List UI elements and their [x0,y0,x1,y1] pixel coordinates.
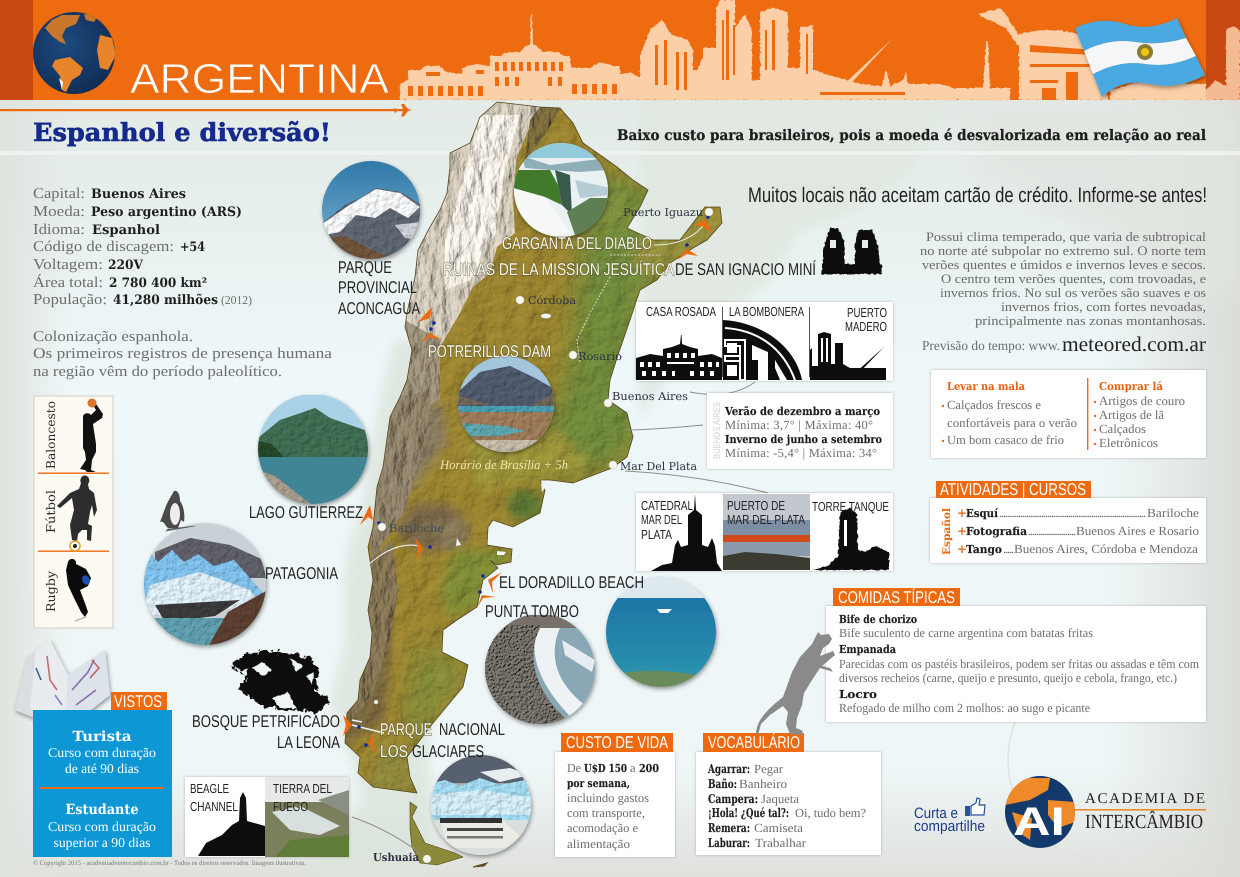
map colour: Andes snow [350,102,560,720]
map colour: northeast green [546,165,677,481]
place labels: PROVINCIAL [338,278,417,297]
icon: football player [57,475,97,551]
panel: vocabulário: Laburar: [708,836,750,850]
weather forecast link: meteored.com.ar [1062,332,1206,356]
map colour: Pampas olive [465,430,590,490]
panel: vocabulário: Baño: [708,777,737,791]
icon: lighthouse [198,792,265,856]
photo: Punta Tombo [483,615,598,725]
panel: comidas típicas: Bife de chorizo [839,613,917,626]
panel: custo de vida: De [567,761,581,775]
place labels: BOSQUE PETRIFICADO [192,712,340,731]
panel: vocabulário: Oi, tudo bem? [795,806,866,820]
climate description: Possui clima temperado, que varia de subtropical [926,229,1206,244]
panel: vistos: Curso com duração [48,819,156,834]
icon: La Bombonera [723,320,802,380]
panel: Buenos Aires landmarks: CASA ROSADA [646,304,716,319]
weather forecast link: Previsão do tempo: www. [922,338,1060,353]
panel: atividades e cursos: Buenos Aires, Córdoba e Mendoza [1014,542,1198,556]
map outline [345,102,722,793]
logo: Academia de Intercâmbio [1005,776,1206,848]
country facts: Espanhol [92,223,160,238]
climate description: principalmente nas zonas montanhosas. [975,313,1206,328]
panel: atividades e cursos: ..... [1003,542,1014,556]
panel: Beagle Channel and Tierra del Fuego: FUEGO [273,799,308,814]
city labels: Buenos Aires [612,390,688,403]
panel: vocabulário: Jaqueta [761,792,799,806]
panel: atividades e cursos: Tango [966,543,1002,556]
country facts: 2 780 400 km² [109,276,207,291]
call to action: curta e compartilhe: Curta e [914,805,958,822]
place labels: PATAGONIA [265,564,339,583]
panel: vocabulário: Trabalhar [755,836,807,850]
place labels: PARQUE [338,258,392,277]
panel: climate of Buenos Aires: Inverno de junho a setembro [725,433,882,446]
panel: vistos [33,692,172,857]
panel: Mar del Plata landmarks [636,493,893,571]
colonization note [33,329,332,380]
panel: climate of Buenos Aires: BUENOS AIRES [712,402,723,459]
country facts: Idioma: [33,222,85,238]
panel: Mar del Plata landmarks: TORRE TANQUE [812,499,889,514]
panel: Beagle Channel and Tierra del Fuego [185,777,349,857]
map colour: Patagonia brown [409,399,452,498]
panel: sports: Fútbol [44,490,58,533]
place labels: PUNTA TOMBO [485,602,579,621]
panel: Buenos Aires landmarks: LA BOMBONERA [729,304,804,319]
panel: Mar del Plata landmarks: PUERTO DE [727,498,785,513]
country facts: (2012) [221,293,252,307]
panel: vistos: Turista [72,729,132,745]
map: Tierra del Fuego [410,802,463,865]
weather forecast link [922,332,1206,356]
panel: Beagle Channel and Tierra del Fuego: BEAGLE [190,781,229,796]
map pins and city dots [343,208,713,863]
panel: sports: Baloncesto [44,401,58,469]
city labels: Mar Del Plata [620,460,697,473]
heading: Espanhol e diversão: Espanhol e diversão! [33,118,331,147]
city labels: Rosario [578,350,622,363]
illustration: petrified forest [232,650,330,712]
photo: El Doradillo Beach [604,575,719,690]
panel: atividades e cursos: Español [941,508,953,555]
panel: vocabulário: VOCABULÁRIO [708,733,800,752]
panel: custo de vida: a [630,761,636,775]
panel: atividades e cursos: ....................... [1028,524,1076,538]
logo: Academia de Intercâmbio: ACADEMIA DE [1085,791,1205,807]
place labels: DE SAN IGNACIO MINÍ [675,260,816,279]
place labels: ACONCAGUA [338,299,420,318]
place labels: PARQUE [380,720,432,739]
panel: atividades e cursos: ...................................................................... [999,506,1146,520]
icon: Casa Rosada [636,335,722,380]
heading: Baixo custo: Baixo custo para brasileiros, pois a moeda é desvalorizada em relação ao real [617,127,1206,144]
leader lines [340,222,768,856]
copyright: © Copyright 2015 - academiadeintercambio.com.br - Todos os direitos reservados. Imagens ilustrativas. [33,860,306,867]
country facts: Moeda: [33,204,85,220]
panel: atividades e cursos: Bariloche [1147,506,1199,520]
panel: comidas típicas: COMIDAS TÍPICAS [838,588,955,607]
panel: comidas típicas: Parecidas com os pastéis brasileiros, podem ser fritas ou assadas e têm com [839,657,1199,671]
photo: port of Mar del Plata [723,494,810,570]
country facts: Buenos Aires [91,187,186,202]
climate description: verões quentes e úmidos e invernos leves e secos. [922,257,1206,272]
panel: Mar del Plata landmarks: PLATA [641,527,672,542]
place labels: LOS [380,742,408,761]
illustration: Ruinas de San Ignacio [822,228,882,274]
skyline: La Bombonera and crane [978,8,1240,100]
panel: custo de vida: com transporte, [567,806,645,820]
climate description: invernos frios, com fortes nevoadas, [1001,299,1206,314]
country facts: 41,280 milhões [113,293,218,308]
place labels: NACIONAL [439,720,505,739]
icon: cathedral [651,494,722,571]
panel: custo de vida [555,733,675,857]
country facts: Área total: [33,274,103,291]
map colour: southern green-ochre [440,550,512,620]
title ARGENTINA: ARGENTINA [130,55,389,102]
panel: sports: Rugby [44,571,58,612]
skyline: Casa Rosada [400,14,620,100]
arrow: plane line [0,104,412,116]
panel: levar na mala e comprar lá: Levar na mala [947,380,1025,393]
panel: Beagle Channel and Tierra del Fuego: TIERRA DEL [273,781,332,796]
panel: custo de vida: U$D 150 [584,762,627,775]
panel: Buenos Aires landmarks: MADERO [845,319,887,334]
panel: vocabulário [696,733,881,855]
panel: levar na mala e comprar lá: Artigos de lã [1099,408,1164,422]
icon: basketball player [80,398,103,472]
panel: comidas típicas: Empanada [839,643,896,656]
panel: vocabulário: Remera: [708,821,750,835]
place labels: EL DORADILLO BEACH [499,573,644,592]
panel: custo de vida: acomodação e [567,821,638,835]
country facts: +54 [180,240,205,255]
panel: levar na mala e comprar lá: Calçados [1099,422,1146,436]
city labels: Ushuaia [373,851,419,864]
city labels: Bariloche [389,522,444,535]
photo: Tierra del Fuego [265,777,349,857]
city labels: Córdoba [528,294,576,307]
photo: Garganta del Diablo [510,140,612,240]
panel: custo de vida: CUSTO DE VIDA [566,733,669,752]
panel: vocabulário: Pegar [754,762,784,776]
icon: thumbs up [965,798,985,816]
panel: vistos: superior a 90 dias [54,835,150,850]
call to action: curta e compartilhe: compartilhe [914,818,985,835]
country facts: Peso argentino (ARS) [91,205,242,220]
map: lakes, river and inlets [352,255,660,733]
logo: Academia de Intercâmbio: INTERCÂMBIO [1085,810,1203,833]
photo: Lago Gutierrez [255,395,370,505]
panel: Mar del Plata landmarks: MAR DEL [641,512,682,527]
panel: vocabulário: ¡Hola! ¿Qué tal?: [708,806,789,820]
panel: Buenos Aires landmarks [636,302,893,381]
country facts: Código de discagem: [33,239,174,255]
panel: atividades e cursos [930,480,1206,563]
panel: custo de vida: alimentação [567,837,630,851]
place labels: POTRERILLOS DAM [428,342,551,361]
panel: levar na mala e comprar lá: Artigos de couro [1099,394,1185,408]
globe icon [33,12,116,94]
panel: vistos: Curso com duração [48,745,156,760]
country facts: Capital: [33,186,85,202]
country facts: Voltagem: [33,257,103,273]
place labels: Horário de Brasília + 5h [439,457,568,472]
panel: levar na mala e comprar lá [931,370,1206,458]
icon: Argentine flag [1075,18,1205,97]
panel: custo de vida: 200 [639,762,659,775]
panel: Mar del Plata landmarks: MAR DEL PLATA [727,512,805,527]
panel: custo de vida: incluindo gastos [567,791,649,805]
icon: rugby player [66,559,91,621]
panel: atividades e cursos: Esquí [966,507,999,520]
panel: vocabulário: Camiseta [754,821,803,835]
panel: vistos: de até 90 dias [65,761,139,776]
panel: climate of Buenos Aires: Mínima: 3,7° | Máxima: 40° [725,418,873,432]
climate description [920,229,1206,328]
panel: climate of Buenos Aires: Verão de dezembro a março [724,405,880,418]
illustration: puma [756,632,835,735]
call to action: curta e compartilhe [914,798,985,835]
panel: comidas típicas: Locro [839,688,877,701]
header band [0,0,1240,102]
panel: levar na mala e comprar lá: confortáveis para o verão [947,416,1077,430]
panel: vocabulário: Banheiro [739,777,787,791]
panel: climate of Buenos Aires: Mínima: -5,4° | Máxima: 34° [725,446,877,460]
panel: vistos: Estudante [66,802,139,818]
panel: vocabulário: Campera: [708,792,758,806]
city labels: Puerto Iguazu [623,206,703,219]
panel: climate of Buenos Aires [707,393,893,469]
country facts: 220V [108,258,144,273]
place labels: GARGANTA DEL DIABLO [502,234,652,253]
country facts: População: [33,292,107,308]
skyline: Puerto Madero [620,0,1010,100]
place labels: RUINAS DE LA MISSION JESUÍTICA [443,260,675,279]
city labels [373,206,703,864]
climate description: invernos frios. No sul os verões são suaves e os [940,285,1206,300]
photo: Aconcagua [320,160,422,262]
colonization note: Colonização espanhola. [33,329,193,345]
panel: levar na mala e comprar lá: Um bom casaco de frio [947,433,1064,447]
panel: atividades e cursos: + [957,524,967,538]
panel: vocabulário: Agarrar: [707,762,750,776]
panel: comidas típicas: Refogado de milho com 2 molhos: ao sugo e picante [839,701,1090,715]
panel: levar na mala e comprar lá: Comprar lá [1099,380,1163,393]
place labels [192,234,816,761]
colonization note: Os primeiros registros de presença humana [33,346,332,362]
climate description: O centro tem verões quentes, com trovoadas, e [941,271,1206,286]
panel: atividades e cursos: ATIVIDADES | CURSOS [940,480,1086,499]
icon: Puerto Madero [810,332,886,380]
panel: levar na mala e comprar lá: Eletrônicos [1099,436,1158,450]
panel: Mar del Plata landmarks: CATEDRAL [641,498,693,513]
panel: custo de vida: por semana, [567,777,630,790]
place labels: LAGO GUTIERREZ [249,503,363,522]
panel: comidas típicas: Bife suculento de carne argentina com batatas fritas [839,626,1093,640]
place labels: LA LEONA [277,733,341,752]
logo: Academia de Intercâmbio: AI [1013,800,1065,844]
panel: Beagle Channel and Tierra del Fuego: CHANNEL [190,799,238,814]
colonization note: na região vêm do período paleolítico. [33,364,282,380]
panel: levar na mala e comprar lá: Calçados frescos e [947,398,1041,412]
panel: vistos: VISTOS [114,692,162,711]
map of Argentina [340,100,730,867]
panel: sports [34,396,113,628]
panel: atividades e cursos: + [957,542,967,556]
place labels: GLACIARES [412,742,484,761]
panel: atividades e cursos: Fotografia [966,525,1027,538]
icon: Torre Tanque [813,508,889,570]
photo: Los Glaciares [429,753,535,858]
panel: atividades e cursos: + [957,506,967,520]
panel: comidas típicas: diversos recheios (carne, queijo e presunto, queijo e cebola, frango, etc.) [839,671,1177,685]
panel: atividades e cursos: Buenos Aires e Rosario [1076,524,1199,538]
panel: Buenos Aires landmarks: PUERTO [847,305,887,320]
climate description: no norte até subpolar no extremo sul. O norte tem [920,243,1206,258]
panel: comidas típicas [826,588,1206,722]
illustration: penguin [160,491,195,531]
photo: Patagonia glacier [142,520,268,652]
photo: Potrerillos Dam [456,354,556,454]
illustration: passport [15,640,110,730]
country facts [33,186,252,308]
